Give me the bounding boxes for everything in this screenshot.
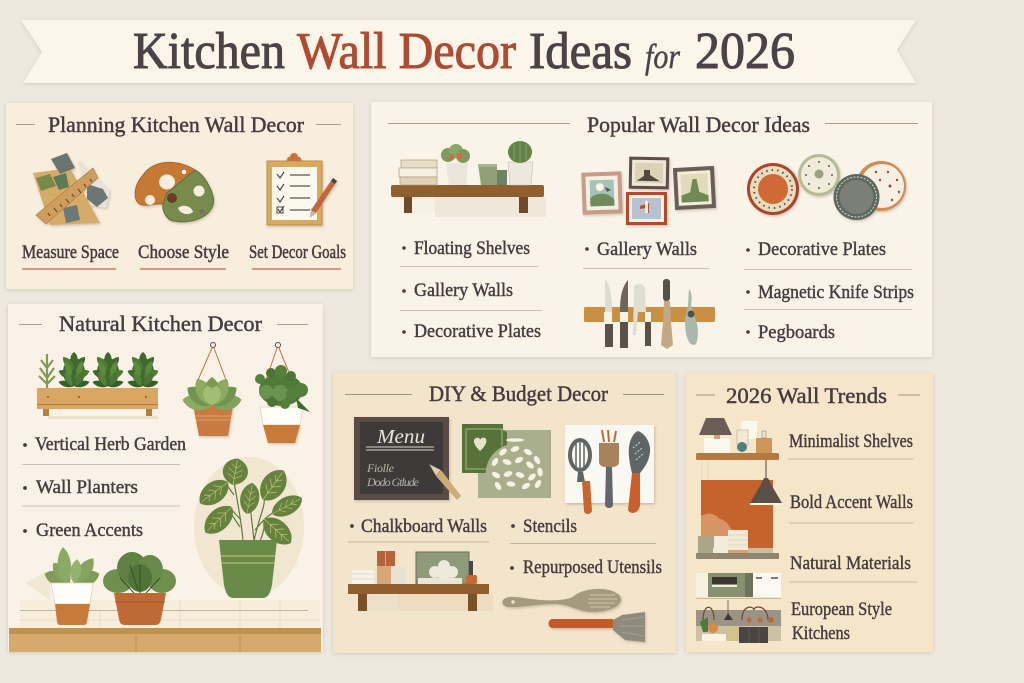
list: pegboards: Pegboards xyxy=(758,322,835,343)
title text xyxy=(133,23,795,80)
list: repurposed utensils: Repurposed Utensils xyxy=(523,557,662,578)
list: stencils xyxy=(510,516,656,544)
panel: popular wall decor ideas xyxy=(371,102,932,357)
illustration: magnetic knife strip xyxy=(584,279,715,349)
title text: for xyxy=(645,37,680,76)
list: magnetic knife strips: Magnetic Knife Strips xyxy=(758,282,914,303)
label: set decor goals: Set Decor Goals xyxy=(249,242,346,263)
list: stencils: Stencils xyxy=(523,516,577,537)
illustration: gallery frames xyxy=(581,157,716,225)
panel: 2026 wall trends xyxy=(686,373,933,652)
label: set decor goals xyxy=(249,242,346,269)
illustration: herb planter box xyxy=(37,352,160,419)
panel: natural kitchen decor xyxy=(8,304,323,652)
list: vertical herb garden: Vertical Herb Garden xyxy=(35,434,186,455)
list: european style kitchens: Kitchens xyxy=(792,623,850,644)
list: bold accent walls xyxy=(789,492,914,523)
icon: checklist clipboard xyxy=(267,153,337,225)
illustration: white and terracotta pot with leaves xyxy=(42,547,102,625)
illustration: hanging white planter xyxy=(255,342,310,443)
list: decorative plates: Decorative Plates xyxy=(414,321,541,342)
label: measure space xyxy=(22,242,119,269)
illustration: basting brush xyxy=(548,612,645,642)
icon: measuring ruler and swatches xyxy=(33,153,110,225)
list: natural materials xyxy=(789,553,917,582)
illustration: potted fiddle leaf plant xyxy=(194,456,306,598)
list: natural materials: Natural Materials xyxy=(790,553,911,574)
list: gallery walls xyxy=(400,280,542,310)
panel: diy and budget decor xyxy=(333,372,676,653)
illustration: wooden counter xyxy=(9,628,321,652)
icon: paint palette xyxy=(135,162,214,222)
list: european style kitchens: European Style xyxy=(791,599,892,620)
panel: planning kitchen wall decor xyxy=(6,103,353,289)
illustration: repurposed utensils on white card xyxy=(565,425,654,514)
list: floating shelves: Floating Shelves xyxy=(414,238,530,259)
list: magnetic knife strips xyxy=(744,282,914,310)
illustration: floating shelf xyxy=(391,141,546,217)
list: wall planters: Wall Planters xyxy=(36,477,138,498)
list: bold accent walls: Bold Accent Walls xyxy=(790,492,913,513)
title banner xyxy=(21,20,916,83)
list: floating shelves xyxy=(400,238,538,266)
illustration: pendant lamp xyxy=(750,460,782,505)
heading: diy: DIY & Budget Decor xyxy=(429,381,609,406)
title text: Kitchen xyxy=(133,23,285,80)
title text: Wall Decor xyxy=(297,23,516,80)
list: chalkboard walls: Chalkboard Walls xyxy=(361,516,487,537)
list: gallery walls: Gallery Walls xyxy=(414,280,513,301)
list: decorative plates column three: Decorative Plates xyxy=(758,239,886,260)
list: wall planters xyxy=(22,477,180,506)
illustration: chalkboard menu: Dodo Gtlude xyxy=(366,475,420,489)
illustration: chalkboard menu xyxy=(354,417,461,500)
illustration: chalkboard menu: Menu xyxy=(376,426,425,448)
list: green accents: Green Accents xyxy=(36,520,143,541)
list: european style kitchens xyxy=(791,599,892,644)
list: minimalist shelves xyxy=(788,431,914,459)
illustration: budget shelf xyxy=(348,551,493,611)
illustration: chalkboard menu: Fiolle xyxy=(366,461,395,475)
illustration: slotted spoon xyxy=(502,589,621,612)
list: minimalist shelves: Minimalist Shelves xyxy=(789,431,913,452)
heading: popular: Popular Wall Decor Ideas xyxy=(587,112,810,137)
label: choose style: Choose Style xyxy=(138,242,229,263)
list: vertical herb garden xyxy=(22,434,186,464)
heading: trends: 2026 Wall Trends xyxy=(726,383,887,408)
illustration: wall tiles xyxy=(20,570,320,628)
illustration: stencils xyxy=(462,424,551,498)
illustration: european style kitchen xyxy=(696,573,781,643)
heading: planning: Planning Kitchen Wall Decor xyxy=(48,112,305,137)
heading: natural: Natural Kitchen Decor xyxy=(59,311,263,336)
list: decorative plates column three xyxy=(744,239,912,270)
list: gallery walls column two xyxy=(583,239,709,268)
illustration: minimalist shelf and accent wall xyxy=(696,418,779,559)
illustration: terracotta pot with spinach xyxy=(103,552,176,625)
title text: 2026 xyxy=(695,23,795,80)
title text: Ideas xyxy=(529,23,632,80)
list: gallery walls column two: Gallery Walls xyxy=(597,239,697,260)
label: measure space: Measure Space xyxy=(22,242,119,263)
illustration: decorative plates xyxy=(747,154,906,220)
illustration: hanging terracotta planter xyxy=(181,342,243,436)
